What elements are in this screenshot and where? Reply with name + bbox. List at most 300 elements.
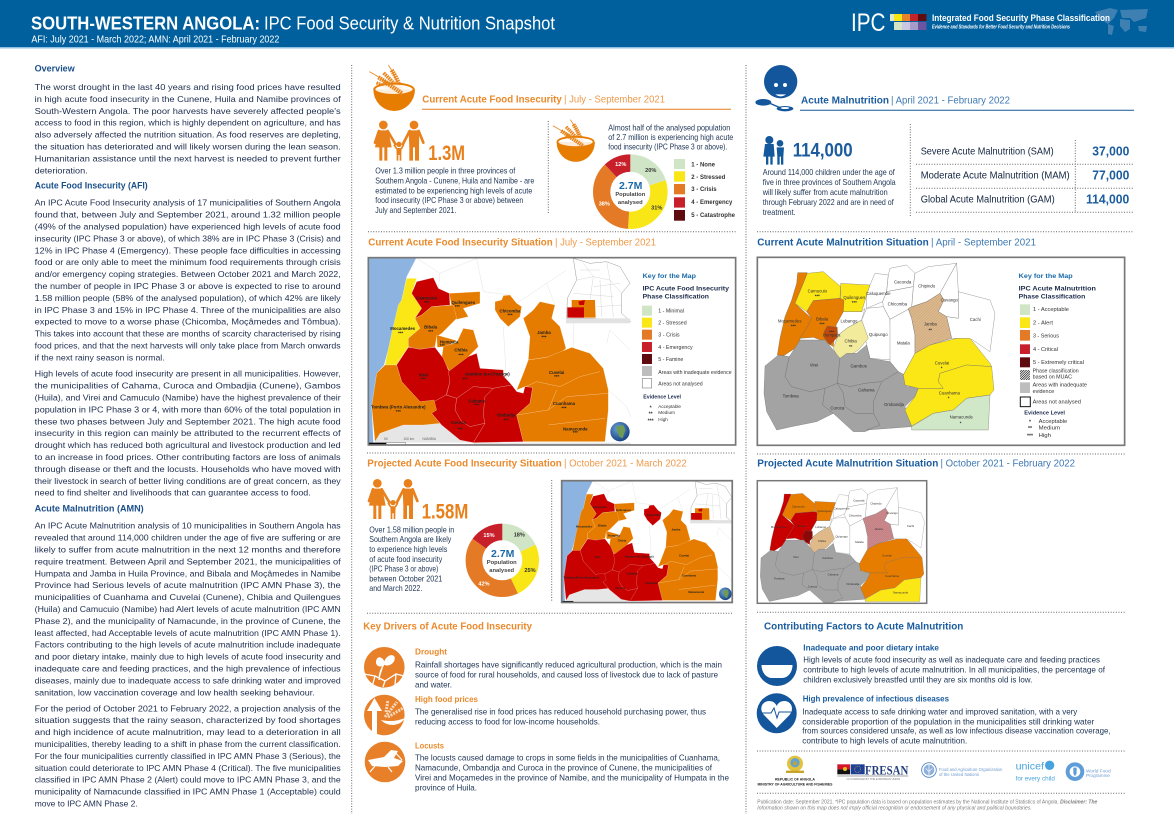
icon: bowl — [757, 646, 797, 686]
figure 114,000: 114,000 — [793, 141, 853, 162]
map key: Key for the Map — [1019, 273, 1073, 280]
icon: locust — [365, 742, 405, 782]
regions — [764, 263, 995, 432]
icon: wheat bowl — [369, 65, 415, 111]
AMN paragraph two: municipalities, thereby leading to a shift in phase from the current classification. — [35, 739, 341, 749]
driver: high food prices: reducing access to food for low-income households. — [415, 717, 600, 727]
heading: current food insecurity map: | July - September 2021 — [555, 237, 656, 248]
AFI paragraph one: the number of people in IPC Phase 3 or above is expected to rise to around — [35, 281, 341, 291]
driver: high food prices: High food prices — [415, 694, 478, 704]
panel: current acute food insecurity — [369, 65, 736, 221]
donut chart: 31% — [651, 205, 662, 211]
driver: drought: source of food for rural households, and caused loss of livestock due to lack of pasture — [415, 670, 718, 680]
map key: 1 - Minimal — [658, 309, 684, 315]
municipality labels: ** — [849, 344, 853, 349]
driver: locusts: The locusts caused damage to crops in some fields in the municipalities of Cuanhama, — [415, 753, 720, 763]
municipality labels: Chipindo — [918, 284, 936, 289]
overview paragraph: Humanitarian assistance until the next harvest is needed to prevent further — [35, 153, 341, 163]
table of malnutrition figures: 114,000 — [1086, 193, 1129, 207]
heading: | April 2021 - February 2022 — [891, 95, 1010, 106]
AFI paragraph two: their livestock in search of better living conditions are of great concern, as they — [35, 476, 341, 486]
map: projected acute malnutrition: Ombandja — [846, 582, 860, 586]
municipality labels: *** — [852, 300, 857, 305]
driver: locusts: Virei and Moçamedes in the province of Namibe, and the municipality of Humpata in the — [415, 773, 729, 783]
map key: Areas not analysed — [658, 382, 703, 388]
AMN paragraph one: diseases, mainly due to inadequate access to safe drinking water and improved — [35, 675, 341, 685]
map: projected acute malnutrition: Namacunde — [893, 591, 909, 595]
globe — [610, 422, 630, 441]
municipality labels: *** — [819, 322, 825, 327]
donut caption: food insecurity (IPC Phase 3 or above). — [608, 141, 727, 151]
donut legend — [674, 159, 736, 221]
map: projected acute malnutrition: Jamba — [874, 527, 883, 531]
map key: High — [1039, 433, 1051, 439]
map: projected acute food insecurity: Mocamedes — [576, 525, 592, 529]
logo: UNICEF — [1016, 761, 1055, 783]
map: projected acute malnutrition: Cuvelai — [882, 554, 892, 558]
figure 1.3M: 1.3M — [428, 142, 465, 165]
overview paragraph: The worst drought in the last 40 years and rising food prices have resulted — [35, 82, 341, 92]
map: projected acute food insecurity: Virei — [594, 555, 601, 559]
description: Around 114,000 children under the age of — [763, 167, 895, 177]
description: five in three provinces of Southern Angola — [763, 177, 896, 187]
description: food insecurity (IPC Phase 3 or above) between — [375, 195, 524, 205]
panel: projected acute malnutrition — [757, 459, 1075, 603]
overview heading: Overview — [35, 64, 75, 74]
map key: *** — [648, 418, 654, 424]
donut chart: 18% — [514, 533, 525, 539]
AFI paragraph one: 12% in IPC Phase 4 (Emergency). These people face difficulties in accessing — [35, 245, 341, 255]
factor: dietary intake: contribute to high levels of acute malnutrition. In all municipalities, the percentage of — [803, 665, 1106, 675]
icon: small wheat bowl — [553, 120, 595, 162]
municipality labels: Tombwa — [783, 394, 799, 399]
donut chart: 38% — [599, 201, 610, 207]
map: current acute food insecurity: 100 km — [403, 437, 414, 441]
description: will likely suffer from acute malnutrition — [762, 187, 888, 197]
map: projected acute malnutrition — [757, 481, 927, 603]
donut chart: 15% — [483, 533, 495, 539]
heading: Key Drivers of Acute Food Insecurity — [363, 621, 532, 633]
municipality labels: Lubango — [841, 319, 858, 324]
map: projected acute food insecurity: Ombadja — [645, 581, 658, 585]
map key: IPC Acute Malnutrition — [1019, 286, 1096, 293]
AMN paragraph one: Factors contributing to the high levels of acute malnutrition include inadequate — [35, 640, 341, 650]
map key: Areas with inadequate — [1033, 383, 1087, 389]
municipality labels: Humpata — [440, 339, 459, 344]
map: projected acute food insecurity: Cahama — [627, 572, 638, 576]
AMN paragraph one: likely to suffer from acute malnutrition in the next 12 months and therefore — [35, 544, 341, 554]
municipality labels: Matala — [897, 340, 910, 345]
overview paragraph: deterioration. — [35, 165, 88, 175]
inset map — [566, 258, 631, 323]
map key: 3 - Crisis — [658, 333, 680, 339]
map: projected acute food insecurity: Chicomba — [647, 513, 661, 517]
description: estimated to be experiencing high levels of acute — [375, 185, 533, 195]
map: projected acute malnutrition: Quipungo — [835, 534, 848, 538]
map: projected acute food insecurity: Jamba — [671, 527, 681, 531]
municipality labels: *** — [462, 377, 468, 382]
driver: locusts: province of Huila. — [415, 783, 477, 793]
description — [762, 167, 896, 217]
heading: current malnutrition map — [757, 237, 1036, 248]
logo: Republic of Angola: MINISTRY OF AGRICULTURE AND FISHERIES — [757, 783, 833, 787]
AMN paragraph one: (Huila) and Camucuio (Namibe) had Alert levels of acute malnutrition (IPC AMN — [35, 604, 341, 614]
municipality labels: *** — [421, 377, 426, 382]
municipality labels: Mocamedes — [390, 326, 416, 331]
subtitle: AFI: July 2021 - March 2022; AMN: April 2021 - February 2022 — [31, 34, 280, 46]
description: Southern Angola - Cunene, Huila and Namibe - are — [375, 175, 535, 185]
AFI paragraph two: population in IPC Phase 3 or 4, with more than 60% of the total population in — [35, 404, 341, 414]
map key: 5 - Extremely critical — [1033, 360, 1084, 366]
driver: high food prices — [415, 694, 706, 727]
sea — [369, 258, 416, 443]
driver: drought: and water. — [415, 680, 452, 690]
description: to experience high levels — [369, 544, 447, 554]
AFI paragraph one: 1.58 million people (58% of the analysed population), of which 42% are likely — [35, 293, 341, 303]
AMN paragraph one: least affected, had Acceptable levels of acute malnutrition (IPC AMN Phase 1). — [35, 628, 341, 638]
icon: child with spoon — [755, 65, 797, 111]
municipality labels: Chicomba — [888, 301, 908, 306]
municipality labels: * — [941, 365, 943, 370]
map key: 1 - Acceptable — [1033, 307, 1069, 313]
AMN paragraph two: For the four municipalities currently classified in IPC AMN Phase 3 (Serious), the — [35, 751, 341, 761]
logo: FRESAN: CO-FINANCED BY THE EUROPEAN UNION — [847, 777, 900, 781]
map key: IPC Acute Food Insecurity — [643, 286, 729, 293]
map key: Phase Classification — [643, 294, 709, 301]
map key: Evidence Level — [1024, 411, 1065, 417]
AFI paragraph two: drought which has reduced both agricultural and livestock production and led — [35, 440, 341, 450]
AFI paragraph two — [35, 369, 341, 498]
IPC logo: Integrated Food Security Phase Classification — [932, 13, 1110, 24]
donut legend: 4 - Emergency — [691, 200, 733, 206]
logo: World Food Programme — [1066, 762, 1111, 781]
map: current acute malnutrition — [757, 257, 1125, 445]
heading: | July - September 2021 — [564, 95, 665, 106]
description: (IPC Phase 3 or above) — [369, 564, 438, 574]
municipality labels: *** — [815, 293, 820, 298]
IPC logo — [851, 9, 1110, 37]
map key: Evidence Level — [643, 395, 681, 401]
map: projected acute malnutrition: Quilengues — [817, 509, 832, 513]
AMN paragraph two: situation could deteriorate to IPC AMN Phase 4 (Critical). The five municipalities — [35, 763, 341, 773]
publication note — [757, 800, 1097, 812]
AMN paragraph one: An IPC Acute Malnutrition analysis of 10 municipalities in Southern Angola has — [35, 521, 341, 531]
factor: dietary intake: High levels of acute food insecurity as well as inadequate care and feeding practices — [803, 655, 1100, 665]
figure 1.58M: 1.58M — [422, 500, 468, 523]
municipality labels: Chibia — [845, 339, 857, 344]
partner logos — [757, 756, 1111, 787]
donut legend: 1 - None — [691, 162, 716, 168]
AMN paragraph one: Humpata and Jamba in Huila Province, and Bibala and Moçâmedes in Namibe — [35, 568, 341, 578]
map: projected acute food insecurity: Gambos (ex-Chiange) — [625, 554, 654, 558]
icon: drought — [364, 647, 405, 688]
AFI paragraph one: if the next rainy season is normal. — [35, 352, 165, 362]
logo: FAO: of the United Nations — [939, 772, 979, 777]
municipality labels: Jamba — [537, 330, 551, 335]
heading: | October 2021 - March 2022 — [564, 459, 687, 470]
heading: current malnutrition map: Current Acute Malnutrition Situation — [757, 237, 929, 248]
municipality labels: Namacunde — [563, 426, 588, 431]
heading: current food insecurity map — [368, 237, 656, 248]
heading — [422, 95, 665, 106]
map key: 5 - Famine — [658, 357, 683, 363]
map: projected acute food insecurity: Bibala — [598, 524, 607, 528]
AMN paragraph one: Province had Serious levels of acute malnutrition (IPC AMN Phase 3), the — [35, 580, 341, 590]
AFI paragraph two: (Huila), and Virei and Camuculo (Namibe) have the highest prevalence of their — [35, 392, 341, 402]
world map motif — [1095, 8, 1148, 35]
municipality labels: Ombandja — [884, 402, 905, 407]
description: Over 1.3 million people in three provinces of — [375, 165, 516, 175]
icon: two children — [763, 136, 784, 165]
AMN paragraph one: inadequate care and feeding practices, and the high prevalence of infectious — [35, 664, 341, 674]
municipality labels: Cuvelai — [935, 360, 949, 365]
factor: infectious diseases: Inadequate access to safe drinking water and improved sanitation, with a very — [802, 706, 1078, 716]
map key: 3 - Serious — [1033, 333, 1059, 339]
AFI paragraph two: need to find shelter and livelihoods that can guarantee access to food. — [35, 488, 311, 498]
donut chart: 2.7M — [619, 180, 643, 192]
municipality labels: *** — [440, 343, 445, 348]
map: current acute food insecurity: 50 — [384, 437, 388, 441]
logo: FAO: Food and Agriculture Organization — [939, 767, 1003, 772]
IPC logo: Evidence and Standards for Better Food Security and Nutrition Decisions — [932, 24, 1070, 30]
AFI paragraph one: food or are only able to meet the minimum food requirements through crisis — [35, 257, 341, 267]
municipality labels — [371, 296, 588, 435]
map key: based on MUAC — [1033, 375, 1072, 381]
map key: ** — [1028, 426, 1032, 432]
municipality labels: *** — [457, 426, 463, 431]
municipality labels: Camucuio — [808, 289, 828, 294]
table of malnutrition figures — [916, 140, 1134, 212]
overview paragraph: the situation has deteriorated and will likely worsen during the lean season. — [35, 142, 341, 152]
publication note: Publication date: September 2021. *IPC population data is based on population estimates by the National Institute of Statistics of Angola. Disclaimer: The — [757, 800, 1097, 806]
municipality labels: Chicomba — [500, 308, 521, 313]
AFI paragraph one: food prices, and that the next harvests will only take place from March onwards — [35, 340, 341, 350]
municipality labels: Ombadja — [497, 413, 516, 418]
municipality labels: Cuvango — [941, 298, 959, 303]
heading — [757, 459, 1075, 470]
description: July and September 2021. — [375, 205, 456, 215]
map: projected acute food insecurity: Quilengues — [616, 508, 632, 512]
municipality labels: Virei — [419, 372, 428, 377]
municipality labels: *** — [791, 324, 796, 329]
map: projected acute malnutrition: Cuanhama — [885, 574, 899, 578]
AMN paragraph two: classified in IPC AMN Phase 2 (Alert) could move to IPC AMN Phase 3, and the — [35, 775, 341, 785]
AFI paragraph one: This takes into account that these are months of scarcity characterised by rising — [35, 329, 341, 339]
factor: dietary intake: Inadequate and poor dietary intake — [803, 643, 939, 653]
heading: current food insecurity map: Current Acute Food Insecurity Situation — [368, 237, 553, 248]
factor: infectious diseases: from sources considered unsafe, as well as low infectious disease vaccination coverage, — [802, 726, 1111, 736]
AMN paragraph two: For the period of October 2021 to February 2022, a projection analysis of the — [35, 703, 341, 713]
municipality labels: ** — [929, 327, 932, 332]
municipality labels: *** — [396, 409, 401, 414]
municipality labels: Quipungo — [869, 332, 888, 337]
map key: 2 - Stressed — [658, 321, 687, 327]
municipality labels: Bibala — [816, 317, 829, 322]
donut chart — [474, 532, 536, 589]
donut legend: 5 - Catastrophe — [691, 213, 736, 219]
municipality labels: *** — [507, 312, 513, 317]
municipality labels: *** — [398, 331, 404, 336]
publication note: Information shown on this map does not imply official recognition or endorsement of any physical and political boundaries. — [757, 806, 1032, 812]
AFI paragraph two: these two phases between July and September 2021. The high acute food — [35, 416, 341, 426]
municipality labels: Gambos — [850, 364, 867, 369]
donut chart: analysed — [489, 568, 515, 574]
table of malnutrition figures: Severe Acute Malnutrition (SAM) — [921, 146, 1054, 157]
map key: Phase Classification — [1019, 294, 1085, 301]
map: projected acute food insecurity: Tombwa (Porto Alexandre) — [564, 576, 599, 580]
donut chart — [599, 162, 662, 220]
map: projected acute malnutrition: Cahama — [828, 572, 839, 576]
municipality labels: *** — [541, 334, 547, 339]
logo: FRESAN — [837, 763, 908, 781]
donut chart: Population — [487, 560, 517, 566]
municipality labels: Gambos (ex-Chiange) — [465, 372, 510, 377]
title: IPC Food Security & Nutrition Snapshot — [264, 13, 555, 33]
table of malnutrition figures: 37,000 — [1092, 145, 1129, 159]
municipality labels: Camucuio — [416, 296, 437, 301]
logo: Republic of Angola: REPUBLIC OF ANGOLA — [775, 778, 815, 782]
heading: current malnutrition map: | April - September 2021 — [931, 237, 1036, 248]
overview paragraph: in high acute food insecurity in the Cunene, Huila and Namibe provinces of — [35, 94, 341, 104]
map: projected acute malnutrition: Curoca — [808, 584, 817, 588]
overview paragraph: access to food in this region, which is highly dependent on agriculture, and has — [35, 118, 341, 128]
municipality labels: *** — [458, 353, 464, 358]
map: projected acute malnutrition: Gambos — [822, 556, 834, 560]
map: projected acute food insecurity: Cuanhama — [682, 573, 696, 577]
AMN paragraph two: move to IPC AMN Phase 2. — [35, 798, 138, 808]
municipality labels: *** — [455, 304, 460, 309]
map key: Medium — [1039, 426, 1060, 432]
map key: Acceptable — [1039, 419, 1067, 425]
municipality labels: Bibala — [424, 324, 438, 329]
map key: High — [658, 417, 668, 422]
logo: FRESAN: FRESAN — [865, 763, 908, 777]
logo: Republic of Angola — [757, 756, 833, 787]
map key: Acceptable — [658, 404, 681, 409]
panel: projected acute food insecurity — [367, 459, 732, 602]
heading: Acute Malnutrition — [801, 95, 889, 106]
donut chart: 25% — [524, 568, 536, 574]
description — [375, 165, 535, 215]
municipality labels: *** — [554, 374, 559, 379]
map: projected acute malnutrition: Chicomba — [849, 513, 862, 517]
map: projected acute malnutrition: Chibia — [818, 539, 826, 543]
AFI paragraph one: in IPC Phase 3 and 15% in IPC Phase 4. Three of the municipalities are also — [35, 305, 341, 315]
heading — [801, 95, 1010, 106]
driver: drought: Drought — [415, 647, 447, 657]
panel: acute malnutrition — [755, 65, 1134, 217]
AFI heading: Acute Food Insecurity (AFI) — [35, 180, 148, 190]
map: projected acute food insecurity: Namacunde — [688, 590, 705, 594]
AMN paragraph two: and high incidence of acute malnutrition, may lead to a deterioration in all — [35, 727, 341, 737]
overview text column — [35, 64, 341, 808]
municipality labels: Cuanhama — [939, 390, 960, 395]
AFI paragraph one: found that, between July and September 2021, around 1.32 million people — [35, 210, 341, 220]
logo: World Food Programme: Programme — [1086, 773, 1111, 778]
AMN paragraph one: require treatment. Between April and September 2021, the municipalities of — [35, 556, 341, 566]
municipality labels: Cuvelai — [549, 370, 564, 375]
map: projected acute malnutrition: Caluquembe — [834, 506, 850, 510]
municipality labels: *** — [503, 417, 509, 422]
factor: infectious diseases: contribute to high levels of acute malnutrition. — [802, 736, 967, 746]
heading — [367, 459, 687, 470]
map key: Key for the Map — [643, 273, 696, 280]
municipality labels: Jamba — [924, 322, 937, 327]
municipality labels: Cahama — [858, 388, 875, 393]
donut caption: Almost half of the analysed population — [608, 123, 731, 133]
driver: drought: Rainfall shortages have significantly reduced agricultural production, which is the main — [415, 660, 722, 670]
municipality labels: Caconda — [894, 280, 912, 285]
donut chart: Population — [615, 192, 646, 198]
map: projected acute malnutrition: Moçamedes — [771, 525, 787, 529]
municipality labels: *** — [424, 300, 429, 305]
municipality labels: Tombwa (Porto Alexandre) — [371, 404, 426, 409]
municipality labels: Humpata — [823, 333, 841, 338]
description: treatment. — [763, 207, 796, 217]
icon: heart pulse — [757, 693, 797, 733]
municipality labels: Cachi — [970, 317, 981, 322]
map: projected acute food insecurity: Curoca — [615, 586, 625, 590]
driver: locusts: Locusts — [415, 741, 444, 751]
municipality labels: Chibia — [454, 347, 468, 352]
icon: family — [375, 121, 423, 161]
municipality labels: * — [948, 395, 950, 400]
map key: Areas with inadequate evidence — [658, 370, 732, 376]
AFI paragraph one: insecurity (IPC Phase 3 or above), of which 38% are in IPC Phase 3 (Crisis) and — [35, 233, 341, 243]
factor: infectious diseases — [802, 694, 1111, 746]
icon: family — [369, 479, 417, 519]
map: projected acute malnutrition: Tombwa — [774, 576, 785, 580]
donut chart: analysed — [618, 200, 643, 206]
overview paragraph: South-Western Angola. The poor harvests have severely affected people's — [35, 106, 341, 116]
map: current acute food insecurity: NAMIBIA — [422, 437, 437, 441]
map key: ** — [649, 411, 653, 417]
municipality labels — [778, 280, 981, 425]
title — [31, 13, 555, 33]
AFI paragraph two: the municipalities of Cahama, Curoca and Ombadjia (Cunene), Gambos — [35, 381, 341, 391]
donut legend: 2 - Stressed — [691, 175, 726, 181]
description — [369, 524, 455, 593]
map: projected acute malnutrition: Cuvango — [886, 511, 898, 515]
AFI paragraph one — [35, 198, 341, 362]
AMN paragraph one — [35, 521, 341, 697]
overview paragraph — [35, 82, 341, 175]
logo: FAO — [922, 763, 1003, 777]
logo: UNICEF: for every child — [1016, 777, 1055, 783]
AMN paragraph one: Phase 2), and the municipality of Namacunde, in the province of Cunene, the — [35, 616, 341, 626]
map: projected acute malnutrition: Lubango — [815, 525, 827, 529]
municipality labels: * — [960, 420, 962, 425]
title: SOUTH-WESTERN ANGOLA: — [31, 13, 260, 33]
AMN paragraph two — [35, 703, 341, 808]
description: between October 2021 — [369, 573, 443, 583]
AFI paragraph one: An IPC Acute Food Insecurity analysis of 17 municipalities of Southern Angola — [35, 198, 341, 208]
heading: Current Acute Food Insecurity — [422, 95, 562, 106]
overview paragraph: also adversely affected the nutrition situation. As food reserves are depleting, — [35, 130, 341, 140]
map: projected acute food insecurity: Humpata — [608, 533, 621, 537]
description: Southern Angola are likely — [369, 534, 452, 544]
map key: * — [650, 405, 652, 411]
map key: 4 - Critical — [1033, 347, 1058, 353]
scale bar — [369, 443, 386, 445]
municipality labels: *** — [829, 329, 834, 334]
map key — [642, 273, 732, 424]
map: projected acute food insecurity: Camucuio — [593, 505, 607, 509]
AMN paragraph one: municipalities of Cuanhama and Cuvelai (Cunene), Chibia and Quilengues — [35, 592, 341, 602]
donut chart: 12% — [615, 162, 626, 168]
factor: dietary intake: children exclusively breastfed until they are six months old is low. — [803, 675, 1032, 685]
map: projected acute malnutrition: Cachi — [907, 524, 915, 528]
